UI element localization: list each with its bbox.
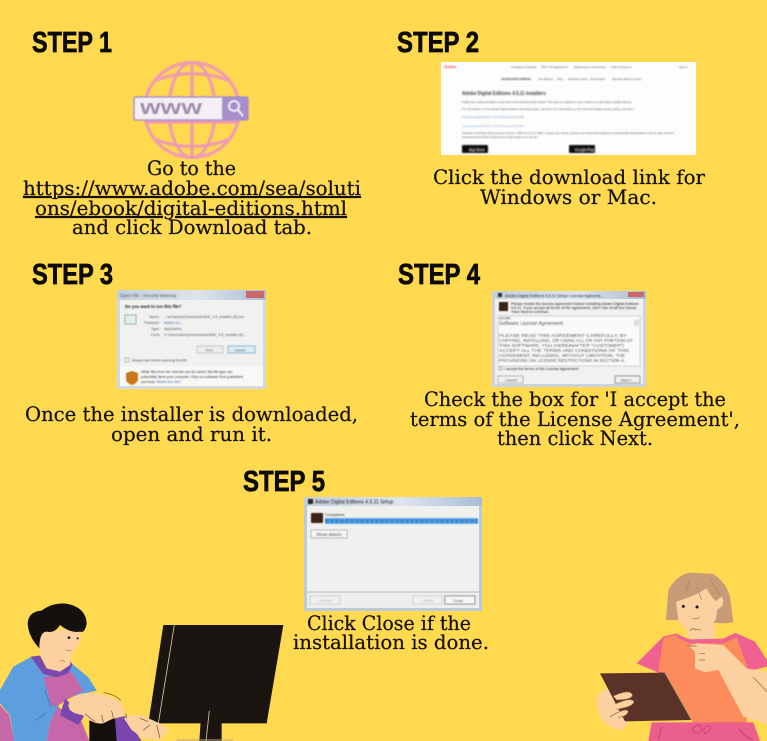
step 5 text — [293, 611, 489, 654]
screenshot: license agreement dialog: PROVISIONS ON LICENSE RESTRICTIONS IN SECTION 4, — [499, 358, 625, 363]
screenshot: security warning dialog: While files from the Internet can be useful, this file type can — [141, 370, 232, 374]
screenshot: adobe download page: Help & Support — [611, 65, 632, 69]
step 2 text: Windows or Mac. — [480, 185, 657, 209]
pointing arm — [688, 643, 767, 724]
step 4 text: Check the box for 'I accept the — [424, 387, 726, 411]
screenshot: adobe download page: Marketing & Commerce — [574, 65, 606, 69]
screenshot: license agreement dialog: ADOBE — [499, 316, 512, 320]
face — [676, 588, 718, 633]
screenshot: security warning dialog: Cancel — [234, 348, 245, 352]
cuffs — [60, 698, 84, 725]
screenshot: security warning dialog: C:\Users\skinny\Downloads\ADE_4.5_Installer (8)... — [164, 333, 246, 337]
illustration: person with tablet — [597, 573, 767, 741]
screenshot: license agreement dialog: Adobe Digital Editions 4.5.11 Setup: License Agreeme... — [505, 293, 604, 298]
fingers — [610, 692, 634, 717]
screenshot: license agreement dialog: I accept the terms of the License Agreement — [504, 367, 579, 371]
screenshot: license agreement dialog: Cancel — [505, 378, 517, 382]
step 4 text — [410, 387, 740, 450]
sweater — [0, 657, 97, 741]
screenshot: setup completed dialog — [304, 497, 482, 611]
screenshot: security warning dialog: Application — [164, 327, 182, 331]
screenshot: setup completed dialog: Show details — [316, 532, 342, 537]
step 5 text: installation is done. — [293, 630, 489, 654]
screenshot: security warning dialog: Publisher: — [144, 321, 160, 325]
step 4 text: then click Next. — [497, 426, 653, 450]
screenshot: security warning dialog: From: — [151, 333, 160, 337]
screenshot: security warning dialog: potentially harm your computer. Only run software from publishers — [141, 375, 243, 379]
step 5 text: Click Close if the — [307, 611, 471, 635]
screenshot: adobe download page: FAQ — [557, 77, 564, 81]
step 1 heading: STEP 1 — [32, 27, 112, 59]
step 1 text: Go to the — [147, 156, 236, 180]
monitor stand — [199, 722, 222, 741]
screenshot: license agreement dialog: THIS SOFTWARE, YOU (HEREINAFTER "CUSTOMER") — [499, 343, 625, 348]
screenshot: adobe download page: Downloads — [590, 77, 605, 81]
hands — [68, 693, 126, 724]
icon: www globe with search bar: www — [139, 97, 203, 119]
tablet — [600, 673, 692, 721]
step 4 text: terms of the License Agreement', — [410, 407, 740, 431]
screenshot: adobe download page: App Store — [469, 148, 485, 152]
screenshot: security warning dialog — [117, 290, 266, 389]
step 1 text: and click Download tab. — [72, 215, 312, 239]
screenshot: security warning dialog: Always ask before opening this file — [132, 358, 187, 362]
screenshot: license agreement dialog: COPYING, INSTALLING, OR USING ALL OR ANY PORTION OF — [499, 338, 633, 343]
screenshot: adobe download page: Release Notes — [568, 77, 588, 81]
screenshot: adobe download page: Sample eBook Library — [612, 77, 642, 81]
step 1 text: ons/ebook/digital-editions.html — [35, 196, 347, 220]
screenshot: adobe download page — [441, 62, 696, 155]
screenshot: security warning dialog: Run — [206, 348, 213, 352]
screenshot: license agreement dialog: 4.5.11. If you accept all terms of the agreement, click I the small box below. — [511, 306, 637, 310]
neck and face — [40, 627, 82, 672]
step 2 heading: STEP 2 — [397, 27, 479, 59]
hand behind tablet — [597, 688, 633, 730]
step 1 text — [23, 156, 361, 239]
screenshot: setup completed dialog: Close — [453, 598, 464, 603]
screenshot: adobe download page: Install your preferred platform and refer to the following Help articles. This can be installed on your machine to read eBook digital editions. — [462, 100, 632, 104]
screenshot: adobe download page: Sensitive Certificate eBook access devices: ADE 4.5.11 (2.1 MB+). Access your library, devices are being downloaded for automatically downloaded to all the other devices — [462, 131, 675, 135]
screenshot: setup completed dialog: < Back — [421, 598, 433, 603]
screenshot: security warning dialog: you trust. What's the risk? — [141, 380, 181, 384]
step 3 text: Once the installer is downloaded, — [25, 402, 358, 426]
screenshot: adobe download page: Download Digital Edition 4.5.11 Macintosh (22 MB) — [462, 115, 524, 119]
step 4 heading: STEP 4 — [398, 259, 480, 291]
screenshot: adobe download page: The Basics — [538, 77, 553, 81]
screenshot: adobe download page: Adobe Digital Editions 4.5.11 Installers — [462, 91, 546, 97]
screenshot: license agreement dialog: AGREEMENT, INCLUDING, WITHOUT LIMITATION, THE — [499, 353, 625, 358]
screenshot: security warning dialog: Adobe Inc. — [164, 321, 181, 325]
neck — [687, 623, 715, 643]
screenshot: security warning dialog: Type: — [151, 327, 160, 331]
screenshot: license agreement dialog: Software License Agreement — [499, 321, 564, 327]
screenshot: license agreement dialog: Then Next to continue. — [511, 310, 549, 314]
screenshot: license agreement dialog: Next > — [621, 378, 633, 382]
hair — [28, 604, 87, 648]
screenshot: adobe download page: PDF & E-signatures — [541, 65, 568, 69]
step 3 text: open and run it. — [111, 422, 272, 446]
icon: www globe with search bar — [134, 62, 248, 158]
screenshot: setup completed dialog: Cancel — [319, 598, 332, 603]
chair or legs — [89, 718, 133, 741]
screenshot: setup completed dialog: Completed — [325, 512, 344, 517]
step 2 text — [433, 165, 705, 209]
screenshot: adobe download page: associated with the Adobe ID authorized and ready straight to your eye size. — [462, 135, 538, 139]
screenshot: license agreement dialog — [492, 291, 646, 387]
screenshot: adobe download page: Google Play — [575, 148, 594, 152]
step 2 text: Click the download link for — [433, 165, 705, 189]
step 5 heading: STEP 5 — [243, 466, 325, 498]
screenshot: security warning dialog: Do you want to run this file? — [125, 304, 182, 309]
screenshot: adobe download page: For information on the Adobe Digital Editions licensing policy, visit here. For information on the General Reader privacy policy, see here. — [462, 107, 634, 111]
skirt — [648, 722, 760, 741]
screenshot: adobe download page: Download Digital Edition 4.5.11 Windows (8.24 MB) — [462, 124, 524, 128]
screenshot: license agreement dialog: ACCEPT ALL THE TERMS AND CONDITIONS OF THIS — [499, 348, 629, 353]
screenshot: adobe download page: Sign in — [679, 65, 689, 69]
step 3 heading: STEP 3 — [32, 259, 113, 291]
screenshot: security warning dialog: ...ser\skinny\Downloads\ADE_4.5_Installer (8).exe — [164, 315, 244, 319]
dress — [637, 633, 767, 673]
screenshot: adobe download page: Adobe — [444, 64, 457, 69]
screenshot: adobe download page: Creativity & Design — [511, 65, 537, 69]
step 1 text: https://www.adobe.com/sea/soluti — [23, 176, 361, 200]
screenshot: security warning dialog: Open File - Security Warning — [120, 293, 177, 298]
step 3 text — [25, 402, 358, 446]
illustration: person at computer — [0, 604, 283, 741]
screenshot: license agreement dialog: PLEASE READ THIS AGREEMENT CAREFULLY. BY — [499, 333, 627, 338]
screenshot: setup completed dialog: Adobe Digital Editions 4.5.11 Setup — [315, 500, 394, 506]
screenshot: security warning dialog: Name: — [149, 315, 160, 319]
hair back — [666, 573, 733, 623]
monitor — [148, 625, 283, 723]
screenshot: adobe download page: ADOBE DIGITAL EDITIONS — [501, 77, 531, 81]
screenshot: license agreement dialog: Please review the license agreement before installing Adobe Digital Editions — [511, 302, 639, 306]
